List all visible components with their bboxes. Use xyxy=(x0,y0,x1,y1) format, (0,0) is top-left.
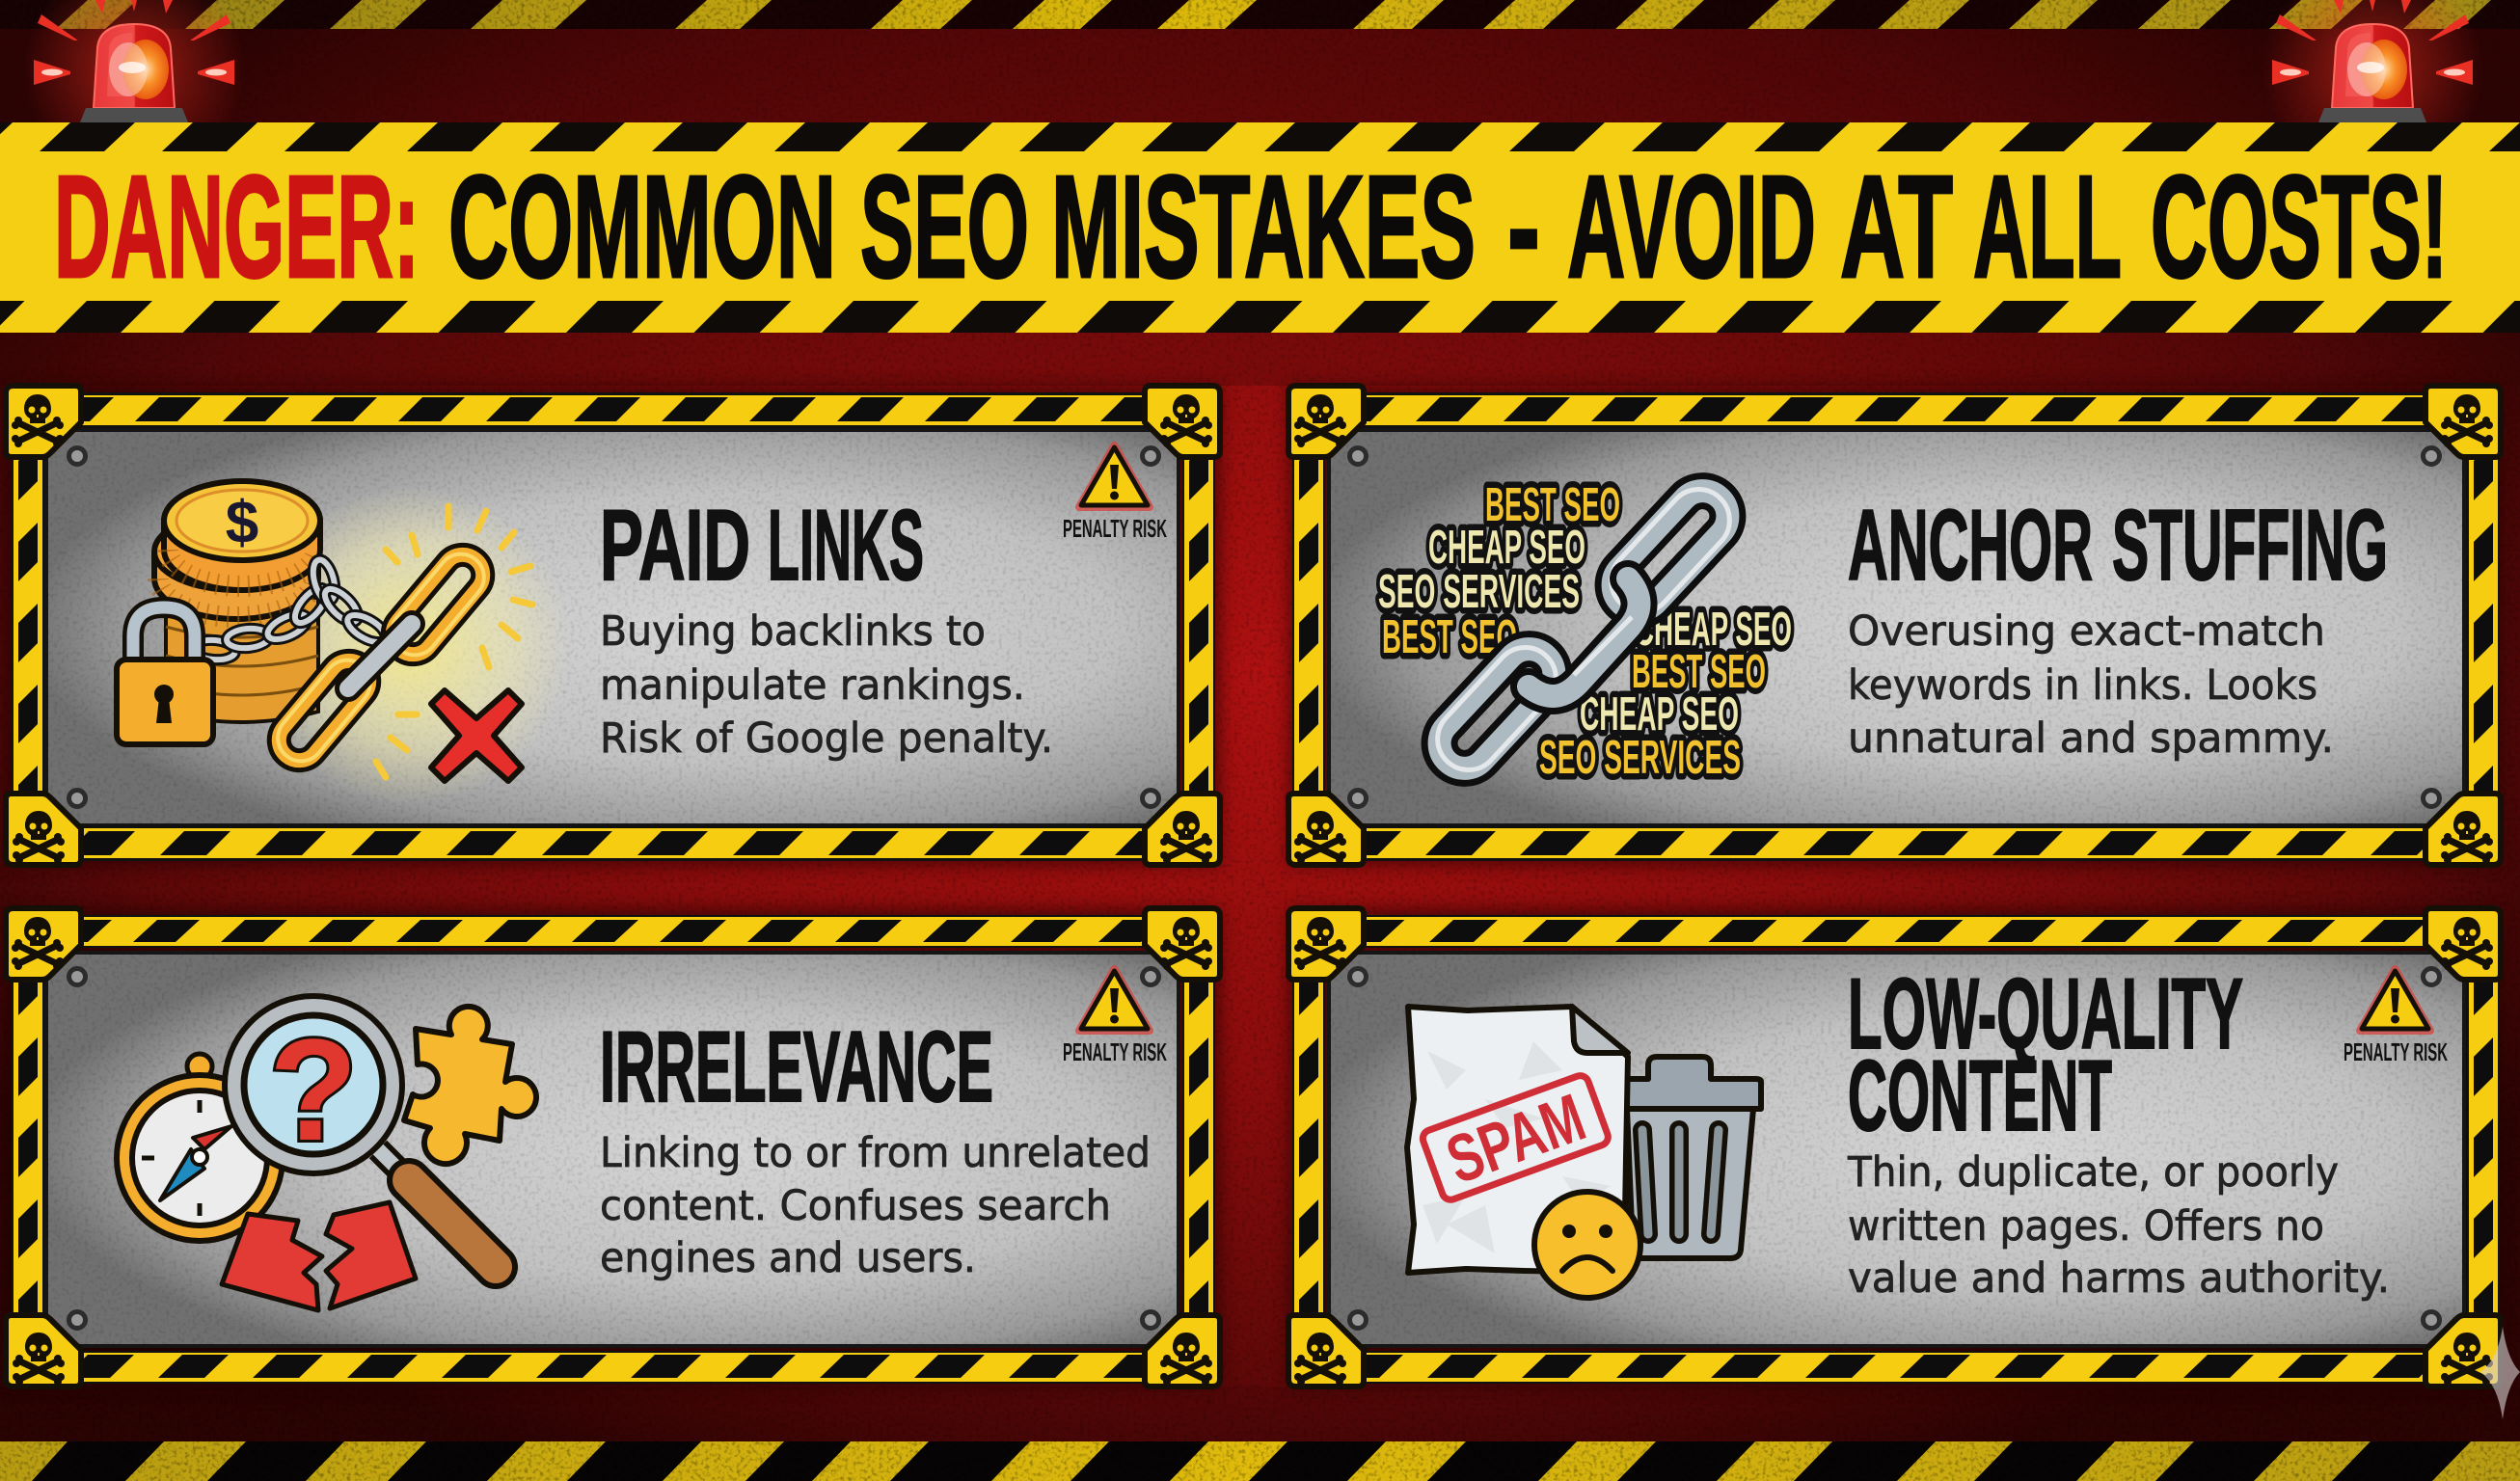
title text: SEO xyxy=(860,145,1029,308)
title text: COMMON xyxy=(448,145,836,308)
text block: irrelevance description: Linking to or from unrelated xyxy=(600,1129,1151,1177)
title banner xyxy=(0,122,2520,333)
text block: anchor stuffing description xyxy=(1848,607,2334,763)
text block: paid links description: Buying backlinks to xyxy=(600,607,986,656)
text block: low-quality content description: Thin, duplicate, or poorly xyxy=(1847,1148,2339,1197)
icon: compass, magnifier, puzzle, broken heart: ? xyxy=(269,1009,358,1171)
icon: chained coins with broken link: $ xyxy=(226,490,258,556)
text block: irrelevance description xyxy=(600,1129,1151,1282)
icon: right warning beacon xyxy=(2262,0,2483,180)
heading: irrelevance: IRRELEVANCE xyxy=(600,1011,993,1123)
icon: chain with stuffed keywords: SEO SERVICES xyxy=(1378,566,1580,618)
icon: chain with stuffed keywords xyxy=(1378,476,1792,784)
icon: chain with stuffed keywords: CHEAP SEO xyxy=(1635,604,1792,656)
title text: DANGER: xyxy=(54,145,420,308)
panel: irrelevance xyxy=(6,908,1221,1387)
heading: low-quality content xyxy=(1848,958,2243,1152)
icon: chain with stuffed keywords: SEO SERVICES xyxy=(1539,732,1741,784)
heading: paid links: PAID xyxy=(600,490,750,602)
icon: compass, magnifier, puzzle, broken heart xyxy=(117,996,536,1310)
panel: low-quality content xyxy=(1288,908,2501,1387)
icon: chain with stuffed keywords: CHEAP SEO xyxy=(1428,522,1585,574)
icon: spam paper, trash can, sad face xyxy=(1407,1007,1761,1298)
panel: paid links xyxy=(6,386,1221,866)
title text xyxy=(54,145,2448,308)
icon: left warning beacon xyxy=(23,0,245,180)
text block: low-quality content description: written pages. Offers no xyxy=(1848,1202,2324,1251)
heading: paid links: LINKS xyxy=(768,490,924,602)
penalty risk badge xyxy=(1063,445,1167,543)
penalty risk badge: PENALTY RISK xyxy=(1063,1037,1167,1066)
penalty risk badge xyxy=(1063,969,1167,1066)
heading: low-quality content: CONTENT xyxy=(1848,1040,2112,1152)
text block: paid links description xyxy=(600,607,1053,763)
icon: chain with stuffed keywords: BEST SEO xyxy=(1382,611,1517,663)
icon: chain with stuffed keywords: BEST SEO xyxy=(1485,479,1620,531)
text block: irrelevance description: content. Confuses search xyxy=(600,1182,1111,1230)
text block: anchor stuffing description: Overusing exact-match xyxy=(1848,607,2325,656)
text block: irrelevance description: engines and users. xyxy=(600,1234,976,1282)
icon: chain with stuffed keywords: CHEAP SEO xyxy=(1580,688,1739,740)
penalty risk badge: PENALTY RISK xyxy=(2344,1037,2448,1066)
title text: MISTAKES xyxy=(1051,145,1476,308)
penalty risk badge xyxy=(2344,969,2448,1066)
icon: chain with stuffed keywords: BEST SEO xyxy=(1632,646,1766,698)
heading: anchor stuffing: ANCHOR xyxy=(1848,490,2093,602)
title text: AVOID xyxy=(1567,145,1816,308)
title text: AT xyxy=(1840,145,1953,308)
title text: - xyxy=(1507,145,1540,308)
icon: corner sparkle watermark xyxy=(2480,1327,2520,1419)
text block: low-quality content description: value and harms authority. xyxy=(1848,1254,2390,1303)
icon: chained coins with broken link xyxy=(117,481,569,805)
text block: paid links description: manipulate rankings. xyxy=(600,661,1025,710)
top hazard stripe strip xyxy=(0,0,2520,29)
text block: low-quality content description xyxy=(1847,1148,2390,1303)
text block: paid links description: Risk of Google penalty. xyxy=(600,714,1053,763)
text block: anchor stuffing description: keywords in links. Looks xyxy=(1848,661,2317,710)
penalty risk badge: PENALTY RISK xyxy=(1063,514,1167,543)
text block: anchor stuffing description: unnatural and spammy. xyxy=(1848,714,2334,763)
bottom hazard stripe strip xyxy=(0,1441,2520,1481)
icon: spam paper, trash can, sad face: SPAM xyxy=(1437,1079,1594,1198)
panel: anchor stuffing xyxy=(1288,386,2501,866)
title text: ALL xyxy=(1973,145,2122,308)
